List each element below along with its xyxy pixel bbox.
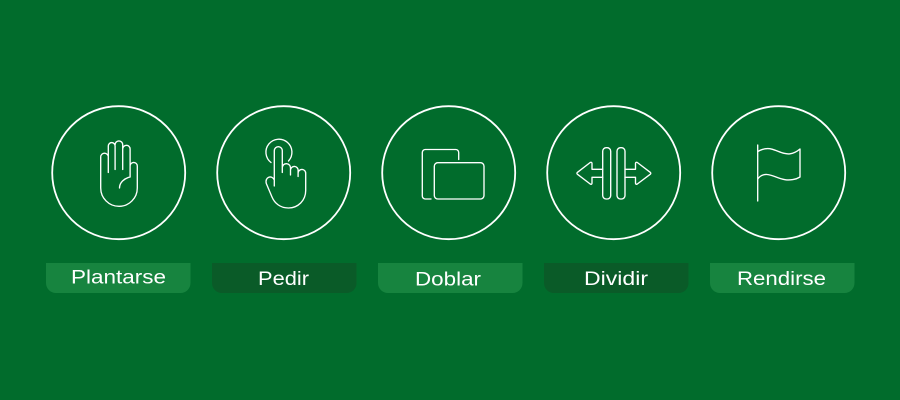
icon: raised hand [101, 141, 137, 206]
icon: tapping finger [266, 139, 306, 208]
label: Plantarse [46, 263, 190, 293]
icon circle: Pedir [217, 106, 350, 239]
item: Dividir [544, 106, 688, 293]
icon circle: Plantarse [52, 106, 185, 239]
label: Doblar [378, 263, 522, 293]
item: Doblar [378, 106, 522, 293]
icon: overlapping cards [422, 150, 484, 199]
item: Pedir [212, 106, 356, 293]
icon: split arrows [577, 148, 651, 199]
icon circle: Dividir [547, 106, 680, 239]
label: Rendirse [710, 263, 854, 293]
icon circle: Rendirse [712, 106, 845, 239]
label: Dividir [544, 263, 688, 293]
label: Dividir: Dividir [584, 269, 649, 290]
label: Doblar: Doblar [415, 270, 482, 290]
icon: flag [758, 145, 800, 201]
label: Plantarse: Plantarse [71, 268, 166, 288]
icon circle: Doblar [382, 106, 515, 239]
item: Rendirse [710, 106, 854, 293]
item: Plantarse [46, 106, 190, 293]
label: Pedir [212, 263, 356, 293]
label: Pedir: Pedir [258, 269, 310, 290]
label: Rendirse: Rendirse [737, 269, 826, 290]
